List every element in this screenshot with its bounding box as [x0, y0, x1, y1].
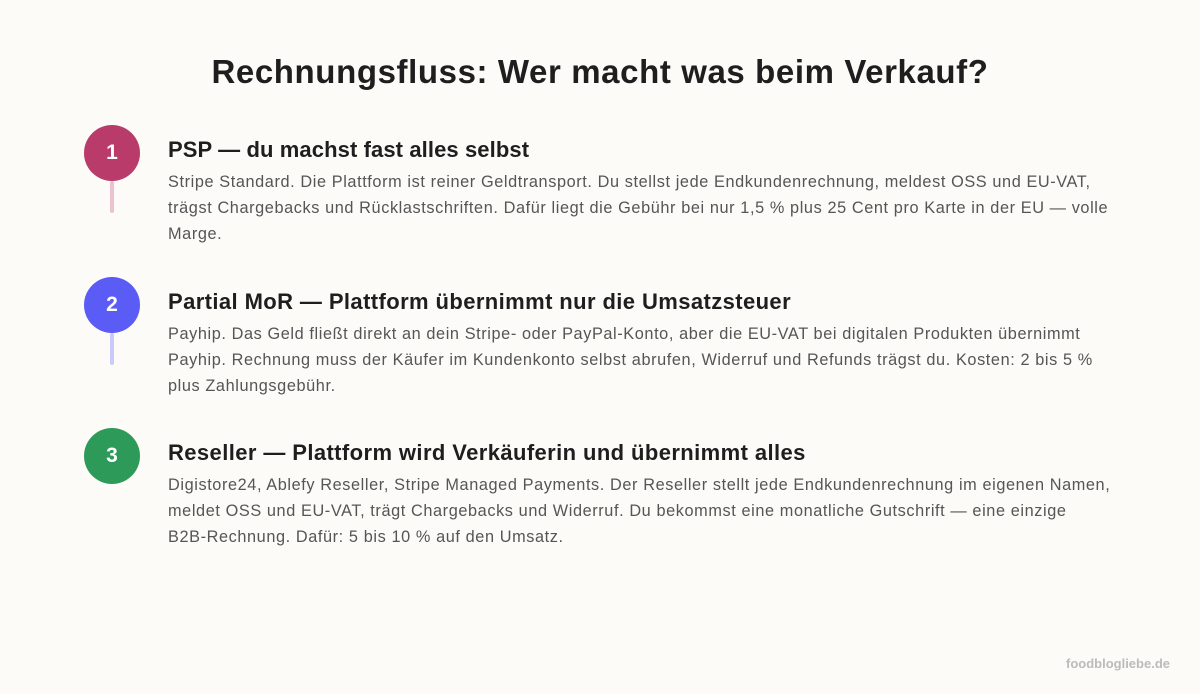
body 1: trägst Chargebacks und Rücklastschriften. Dafür liegt die Gebühr bei nur 1,5 % plus 25 Cent pro Karte in der EU — volle	[168, 199, 1108, 217]
body 1: Stripe Standard. Die Plattform ist reiner Geldtransport. Du stellst jede Endkundenrechnung, meldest OSS und EU-VAT,	[168, 173, 1091, 191]
icon: circle 2: 2	[106, 293, 118, 316]
heading 1: PSP — du machst fast alles selbst	[168, 137, 529, 162]
title: Rechnungsfluss: Wer macht was beim Verkauf?	[211, 53, 989, 90]
connector 1	[110, 181, 114, 213]
icon: circle 3: 3	[106, 444, 118, 467]
icon: circle 1: 1	[106, 141, 118, 164]
connector 2	[110, 333, 114, 365]
body 3: Digistore24, Ablefy Reseller, Stripe Managed Payments. Der Reseller stellt jede Endkundenrechnung im eigenen Namen,	[168, 476, 1110, 494]
step 3	[84, 428, 1110, 546]
icon: circle 1	[84, 125, 140, 181]
heading 3: Reseller — Plattform wird Verkäuferin und übernimmt alles	[168, 440, 806, 465]
body 2: Payhip. Das Geld fließt direkt an dein Stripe- oder PayPal-Konto, aber die EU-VAT bei digitalen Produkten übernimmt	[168, 325, 1080, 343]
body 2: Payhip. Rechnung muss der Käufer im Kundenkonto selbst abrufen, Widerruf und Refunds trägst du. Kosten: 2 bis 5 %	[168, 351, 1093, 369]
body 2: plus Zahlungsgebühr.	[168, 377, 336, 395]
icon: circle 2	[84, 277, 140, 333]
body 3	[168, 476, 1110, 546]
step 2	[84, 277, 1093, 395]
body 2	[168, 325, 1093, 395]
body 3: meldet OSS und EU-VAT, trägt Chargebacks und Widerruf. Du bekommst eine monatliche Gutschrift — eine einzige	[168, 502, 1067, 520]
step 1	[84, 125, 1108, 243]
footer credit: foodblogliebe.de	[1066, 656, 1170, 671]
body 1	[168, 173, 1108, 243]
icon: circle 3	[84, 428, 140, 484]
heading 2: Partial MoR — Plattform übernimmt nur die Umsatzsteuer	[168, 289, 791, 314]
body 1: Marge.	[168, 225, 222, 243]
body 3: B2B-Rechnung. Dafür: 5 bis 10 % auf den Umsatz.	[168, 528, 564, 546]
